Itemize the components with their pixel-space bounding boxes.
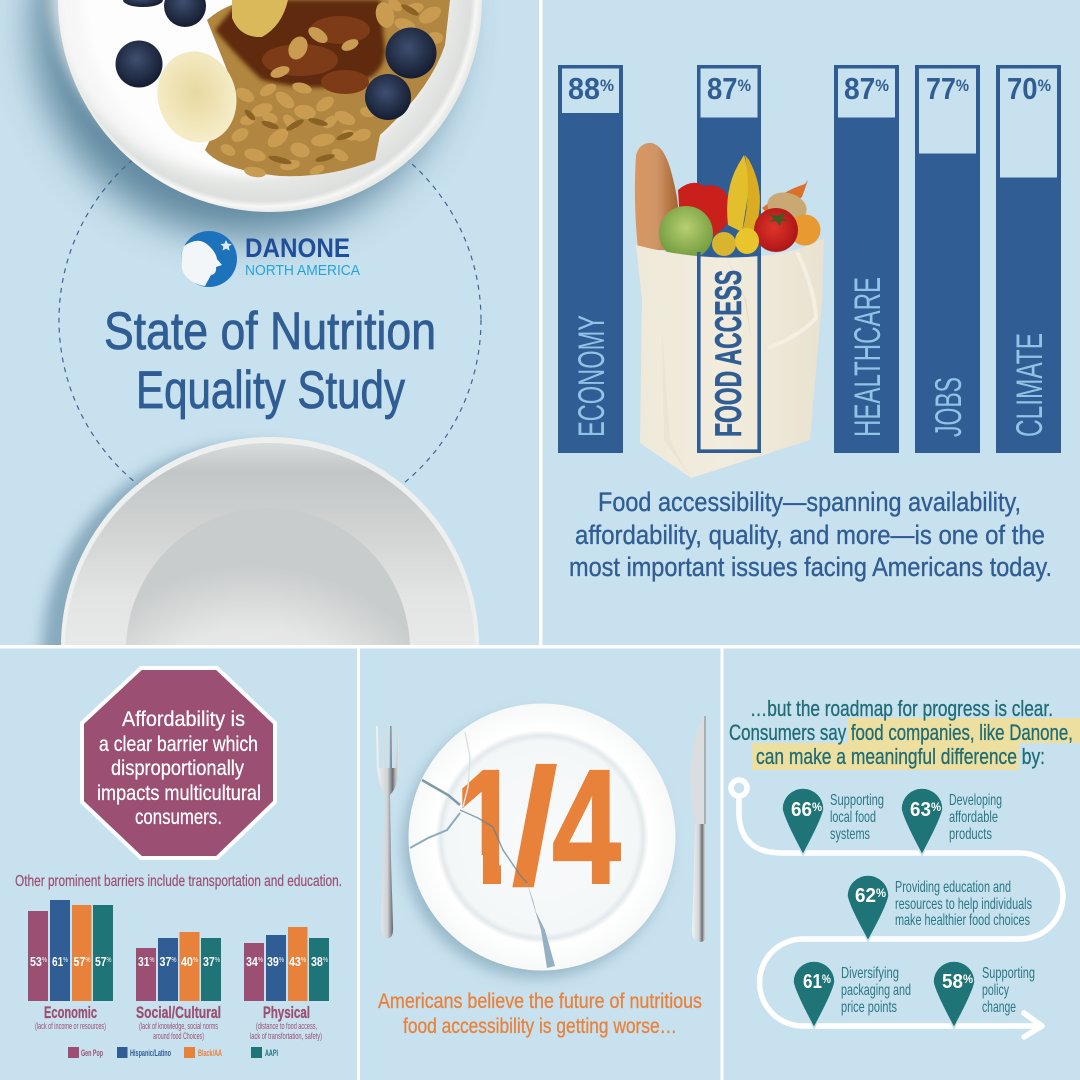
bar: healthcare: % xyxy=(875,76,889,95)
bar chart: social and cultural: % xyxy=(150,957,154,964)
pin: 61 percent: 61 xyxy=(803,971,825,993)
big stat: one in four xyxy=(462,764,621,888)
bar: climate: CLIMATE xyxy=(1009,333,1050,437)
bar chart: social and cultural xyxy=(136,932,221,1041)
icon: fork xyxy=(376,726,399,938)
pin: 61 percent: Diversifying xyxy=(841,965,899,982)
pin: 61 percent xyxy=(793,961,911,1028)
bar chart: social and cultural: (lack of knowledge, social norms xyxy=(139,1021,218,1031)
legend: Hispanic/Latino xyxy=(130,1048,171,1058)
bar: economy xyxy=(558,65,623,453)
text: food accessibility statement xyxy=(569,487,1052,582)
bar chart: physical: 39 xyxy=(267,954,281,969)
bar chart: economic: % xyxy=(85,957,90,964)
title: State of Nutrition xyxy=(104,302,436,361)
pin: 66 percent: systems xyxy=(830,826,870,843)
bar chart: social and cultural: Social/Cultural xyxy=(136,1003,221,1022)
bar: food access background xyxy=(697,65,761,265)
icon: knife xyxy=(690,714,706,942)
legend xyxy=(68,1047,278,1058)
photo: broken plate xyxy=(403,704,676,978)
bar: healthcare: HEALTHCARE xyxy=(847,277,888,437)
bar chart: economic: 61 xyxy=(52,954,66,969)
octagon callout: consumers. xyxy=(135,806,222,829)
bar: climate: 70 xyxy=(1007,71,1041,106)
pin: 58 percent xyxy=(933,961,1035,1028)
text: plate statement: food accessibility is getting worse… xyxy=(403,1015,677,1038)
bar chart: social and cultural: around food Choices) xyxy=(153,1031,204,1041)
legend: Gen Pop xyxy=(81,1048,103,1058)
bar chart: physical: 38 xyxy=(311,954,325,969)
big stat: one in four: 1 xyxy=(455,736,520,919)
heading xyxy=(729,696,1073,769)
pin: 61 percent: packaging and xyxy=(841,982,911,999)
bar chart: physical: % xyxy=(258,957,263,964)
bar chart: economic: (lack of income or resources) xyxy=(35,1021,106,1031)
text: other barriers heading: Other prominent barriers include transportation and education. xyxy=(15,873,342,890)
bar chart: physical: % xyxy=(279,957,284,964)
bar chart: physical: % xyxy=(301,957,306,964)
pin: 58 percent: % xyxy=(963,972,973,986)
wordmark: DANONE xyxy=(245,233,350,263)
panel: important issues chart xyxy=(558,65,1061,582)
pin: 58 percent: 58 xyxy=(942,971,964,993)
bar chart: economic: 57 xyxy=(74,954,88,969)
pin: 62 percent xyxy=(847,875,1032,941)
plate cracks xyxy=(410,732,555,968)
bar: jobs: 77 xyxy=(926,71,960,106)
bar chart: physical: lack of transfortation, safety) xyxy=(250,1031,322,1041)
bar: food access outline xyxy=(699,252,759,451)
bar chart: social and cultural: 31 xyxy=(138,954,152,969)
bar: economy: ECONOMY xyxy=(571,315,612,437)
pin: 63 percent: products xyxy=(949,826,992,843)
road path with arrow xyxy=(731,780,1063,1037)
bar: economy: 88 xyxy=(568,71,602,106)
bar chart: economic: % xyxy=(63,957,68,964)
bar chart: physical: Physical xyxy=(263,1003,310,1022)
pin: 66 percent: Supporting xyxy=(830,792,884,809)
photo: granola bowl xyxy=(50,0,482,212)
panel: affordability barriers xyxy=(15,668,342,1058)
panel: broken plate statistic xyxy=(376,704,706,1038)
octagon callout: Affordability is xyxy=(122,708,245,731)
bar: jobs xyxy=(915,65,980,453)
icon: child profile xyxy=(181,231,237,287)
legend: AAPI xyxy=(265,1048,278,1058)
bar: climate xyxy=(996,65,1061,453)
octagon callout: a clear barrier which xyxy=(99,733,258,756)
panel: study title xyxy=(6,0,484,645)
highlight: meaningful difference xyxy=(752,743,1019,770)
pin: 63 percent: Developing xyxy=(949,792,1002,809)
octagon callout: disproportionally xyxy=(111,757,244,780)
bar: jobs: JOBS xyxy=(928,377,969,437)
bar: economy: % xyxy=(600,76,614,95)
legend: Black/AA xyxy=(198,1048,222,1058)
panel: roadmap xyxy=(729,696,1080,1037)
pin: 63 percent: affordable xyxy=(949,809,998,826)
bar chart: social and cultural: 40 xyxy=(181,954,195,969)
text: food accessibility statement: Food accessibility—spanning availability, xyxy=(598,487,1021,517)
pin: 58 percent: Supporting xyxy=(982,965,1035,982)
bar chart: economic xyxy=(28,900,113,1031)
pin: 66 percent: % xyxy=(812,800,822,814)
bar chart: economic: % xyxy=(107,957,112,964)
bar: food access outline: FOOD ACCESS xyxy=(708,270,749,437)
photo: grocery bag xyxy=(635,143,824,478)
highlight: food companies xyxy=(848,718,1080,743)
bar chart: physical: 34 xyxy=(246,954,260,969)
bar chart: economic: 53 xyxy=(30,954,44,969)
pin: 66 percent xyxy=(782,788,884,855)
bar chart: social and cultural: % xyxy=(171,957,176,964)
bar chart: physical: 43 xyxy=(289,954,303,969)
dashed circle xyxy=(58,160,482,485)
pin: 58 percent: policy xyxy=(982,982,1009,999)
pin: 61 percent: price points xyxy=(841,999,897,1016)
title xyxy=(104,302,436,420)
bar chart: physical: % xyxy=(323,957,328,964)
bar chart: physical xyxy=(244,927,329,1041)
pin: 66 percent: 66 xyxy=(791,799,813,821)
bar: climate: % xyxy=(1038,76,1051,95)
pin: 62 percent: % xyxy=(876,886,886,900)
bar: jobs: % xyxy=(956,76,969,95)
big stat: one in four: / xyxy=(512,735,557,918)
pin: 61 percent: % xyxy=(822,972,831,986)
bar chart: social and cultural: % xyxy=(193,957,198,964)
text: plate statement: Americans believe the future of nutritious xyxy=(378,990,702,1013)
bowl shadows xyxy=(6,0,484,645)
bar chart: economic: % xyxy=(42,957,47,964)
pin: 62 percent: 62 xyxy=(855,885,877,907)
pin: 58 percent: change xyxy=(982,999,1016,1016)
pin: 66 percent: local food xyxy=(830,809,876,826)
big stat: one in four: 4 xyxy=(552,736,621,918)
pin: 63 percent: % xyxy=(931,800,941,814)
bar chart: social and cultural: 37 xyxy=(160,954,174,969)
pin: 62 percent: Providing education and xyxy=(895,879,1011,896)
octagon callout xyxy=(82,668,275,858)
pin: 63 percent xyxy=(901,788,1002,855)
pin: 63 percent: 63 xyxy=(910,799,932,821)
bar chart: economic: Economic xyxy=(44,1003,97,1022)
bar: healthcare xyxy=(834,65,899,453)
photo: empty bowl xyxy=(61,437,479,645)
bar chart: economic: 57 xyxy=(95,954,109,969)
bar chart: physical: (distance to food access, xyxy=(256,1021,317,1031)
logo: Danone North America xyxy=(181,231,360,287)
bar: food access background: % xyxy=(738,76,751,95)
bar: healthcare: 87 xyxy=(844,71,878,106)
division name: NORTH AMERICA xyxy=(245,262,360,279)
title: Equality Study xyxy=(136,361,405,420)
bar: food access background: 87 xyxy=(707,71,741,106)
bar chart: social and cultural: % xyxy=(215,957,220,964)
bar chart: social and cultural: 37 xyxy=(203,954,217,969)
octagon callout: impacts multicultural xyxy=(97,782,261,805)
text: plate statement xyxy=(378,990,702,1038)
